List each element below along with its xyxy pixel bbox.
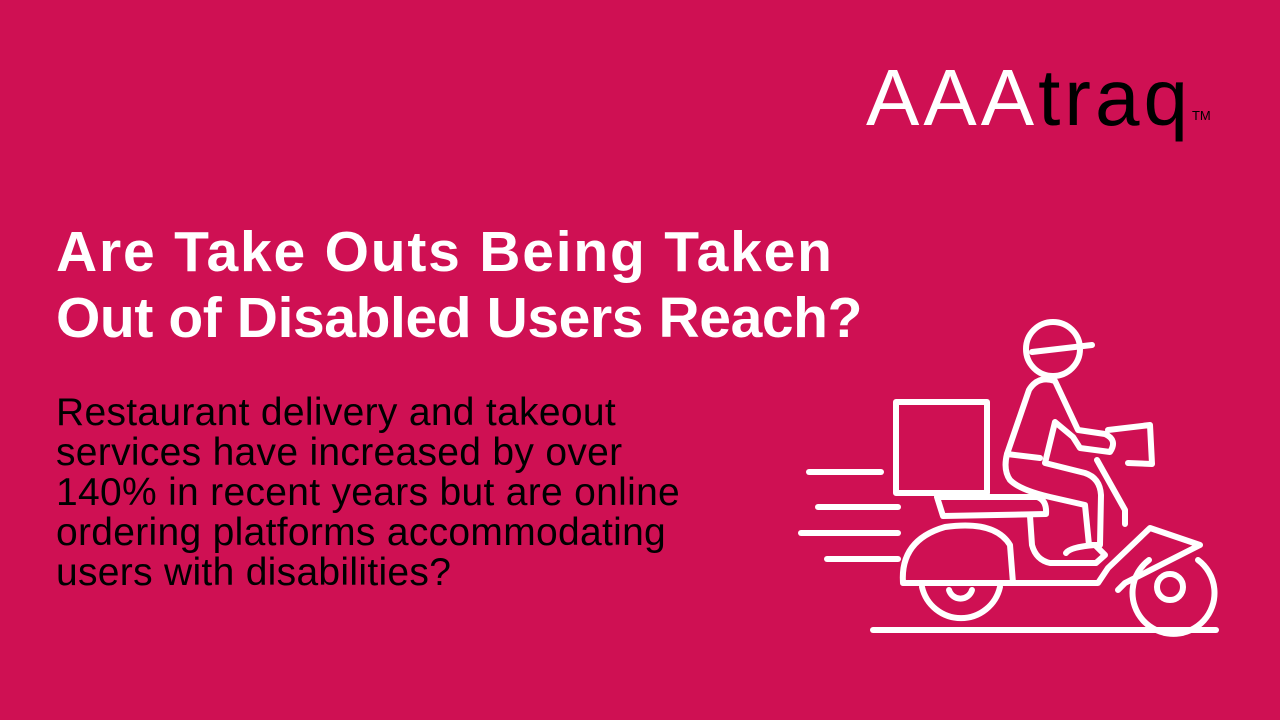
seat (937, 497, 1046, 516)
title (56, 220, 862, 350)
body text: Restaurant delivery and takeout (56, 391, 616, 434)
logo: AAAtraqTM (866, 53, 1211, 142)
body text: users with disabilities? (56, 551, 451, 594)
title: Are Take Outs Being Taken (56, 220, 834, 284)
rear body (903, 525, 1013, 583)
body text: 140% in recent years but are online (56, 471, 680, 514)
box (896, 402, 987, 493)
body text: services have increased by over (56, 431, 622, 474)
ground (873, 627, 1216, 633)
body text: ordering platforms accommodating (56, 511, 666, 554)
rider body (1006, 379, 1113, 545)
title: Out of Disabled Users Reach? (56, 286, 862, 350)
front wheel (1132, 560, 1214, 634)
helmet (1026, 322, 1092, 376)
front column and shield (1013, 528, 1200, 590)
body text (56, 391, 680, 594)
speed lines (801, 472, 898, 559)
legs/floor (1030, 516, 1105, 563)
rear wheel (922, 587, 1000, 618)
